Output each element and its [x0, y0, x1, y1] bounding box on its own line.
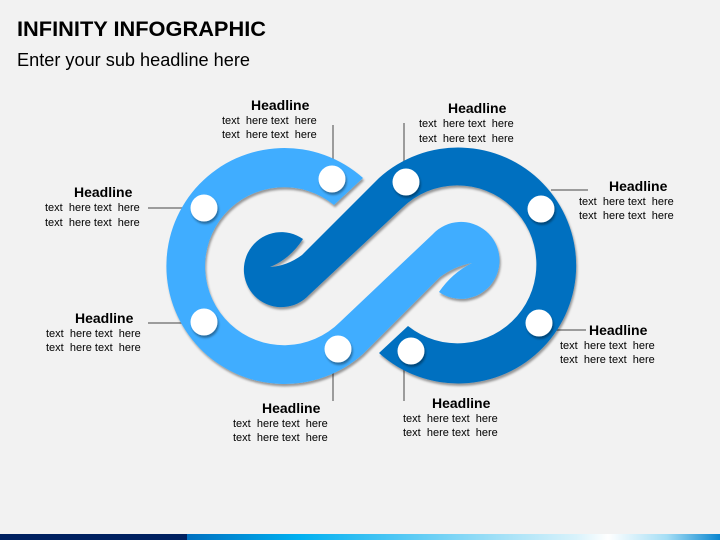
infinity loop: dark blue band — [244, 148, 576, 384]
text block: upper left — [45, 184, 140, 229]
text block: bottom centre left: text here text here — [233, 418, 328, 430]
text block: upper right — [579, 178, 674, 222]
text block: upper right: text here text here — [579, 210, 674, 222]
footer bar — [0, 534, 720, 540]
text block: bottom centre right — [403, 395, 498, 439]
infinity loop: light blue band — [166, 148, 500, 384]
text block: lower left: Headline — [75, 310, 134, 326]
text block: bottom centre right: text here text here — [403, 413, 498, 425]
leader lines — [148, 123, 588, 401]
text block: upper left: Headline — [74, 184, 133, 200]
text block: top left: Headline — [251, 97, 310, 113]
text block: upper right: text here text here — [579, 196, 674, 208]
text block: top right: Headline — [448, 100, 507, 116]
text block: top right: text here text here — [419, 133, 514, 145]
text block: bottom centre left: Headline — [262, 400, 321, 416]
text block: top left: text here text here — [222, 129, 317, 141]
text block: lower right: text here text here — [560, 354, 655, 366]
text block: upper right: Headline — [609, 178, 668, 194]
title: INFINITY INFOGRAPHIC — [17, 18, 266, 41]
text block: bottom centre left: text here text here — [233, 432, 328, 444]
text block: lower left: text here text here — [46, 328, 141, 340]
node markers — [190, 166, 554, 364]
subtitle: Enter your sub headline here — [17, 50, 250, 70]
text block: top left — [222, 97, 317, 141]
text block: upper left: text here text here — [45, 217, 140, 229]
text block: bottom centre left — [233, 400, 328, 444]
text block: top left: text here text here — [222, 115, 317, 127]
text block: bottom centre right: Headline — [432, 395, 491, 411]
text block: upper left: text here text here — [45, 202, 140, 214]
text block: lower right: Headline — [589, 322, 648, 338]
text block: lower right: text here text here — [560, 340, 655, 352]
text block: bottom centre right: text here text here — [403, 427, 498, 439]
text block: lower right — [560, 322, 655, 366]
text block: lower left: text here text here — [46, 342, 141, 354]
text block: top right: text here text here — [419, 118, 514, 130]
text block: top right — [419, 100, 514, 145]
text block: lower left — [46, 310, 141, 354]
